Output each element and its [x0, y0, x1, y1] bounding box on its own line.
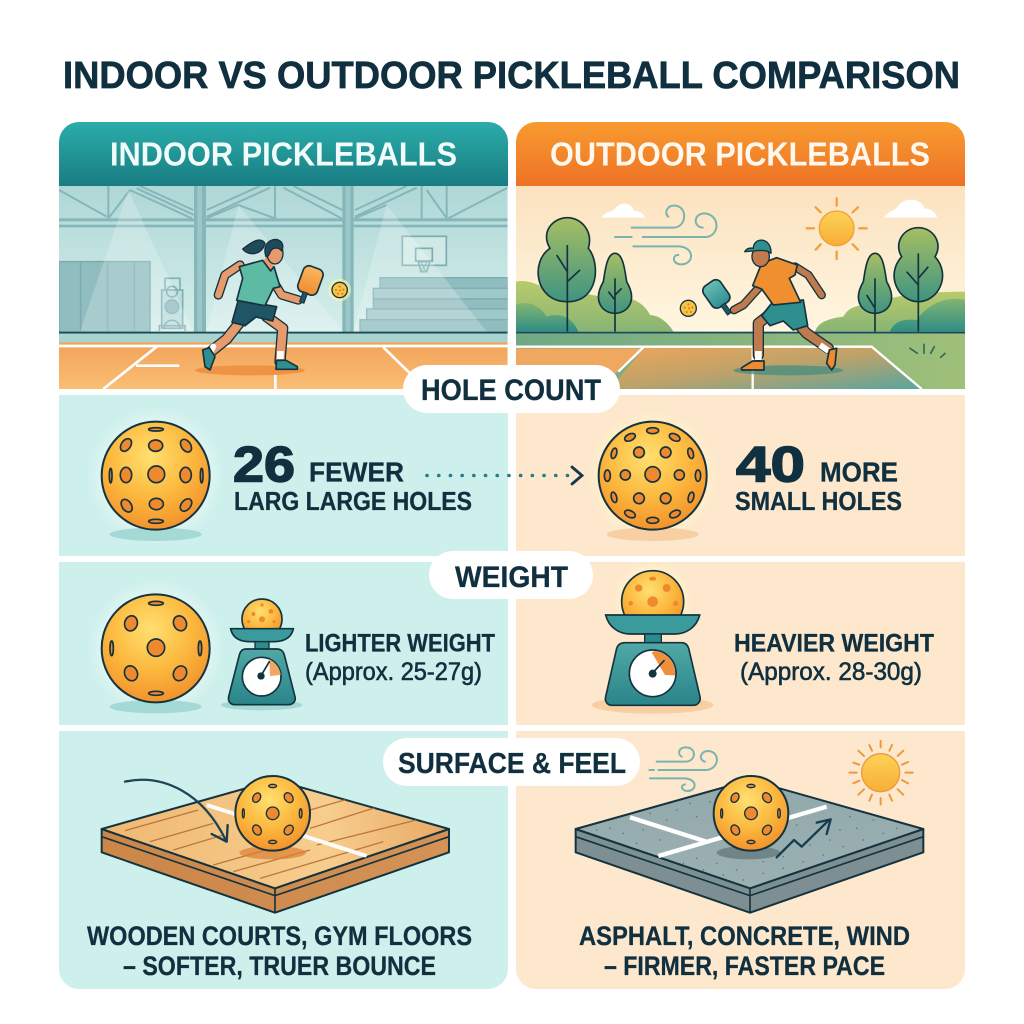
surface text: indoor [87, 921, 472, 981]
hole count text: indoor: FEWER [309, 456, 404, 488]
indoor ball in flight [328, 279, 351, 301]
surface text: outdoor [579, 921, 910, 981]
heading: hole count pill [403, 365, 620, 413]
surface text: indoor: – SOFTER, TRUER BOUNCE [123, 951, 436, 981]
ball machine [159, 278, 185, 331]
outdoor ball in flight [680, 300, 696, 316]
heading: surface and feel pill: SURFACE & FEEL [398, 748, 626, 780]
icon: wind [649, 747, 717, 791]
icon: outdoor scale with ball [592, 560, 713, 714]
ceiling light beams [80, 190, 487, 332]
panel: indoor header [59, 122, 508, 186]
illustration: wooden court with ball [102, 776, 449, 913]
panel: indoor hole count row [59, 395, 508, 556]
arrow: incoming ball path [125, 780, 228, 842]
illustration: indoor gym scene [59, 186, 508, 389]
hole count text: outdoor: MORE [820, 456, 898, 488]
grass tufts [910, 344, 945, 357]
weight text: outdoor [734, 630, 934, 686]
icon: sun [849, 741, 913, 805]
panel: outdoor surface row [516, 731, 965, 989]
icon: indoor ball for weight [87, 580, 224, 717]
weight text: indoor: (Approx. 25-27g) [305, 658, 482, 686]
icon: indoor scale with ball [221, 599, 302, 710]
title: INDOOR VS OUTDOOR PICKLEBALL COMPARISON [63, 55, 960, 97]
surface text: outdoor: – FIRMER, FASTER PACE [604, 951, 885, 981]
hole count text: indoor [233, 436, 472, 516]
player shadow [195, 365, 305, 375]
heading: weight pill [429, 551, 593, 599]
indoor player [203, 239, 325, 370]
heading: surface and feel pill [383, 738, 640, 786]
hills [516, 281, 673, 332]
outdoor player [700, 240, 837, 370]
heading: weight pill: WEIGHT [455, 561, 568, 594]
court [516, 347, 922, 389]
panel: outdoor weight row [516, 562, 965, 725]
panel: indoor weight row [59, 562, 508, 725]
arrow: dotted comparison arrow [427, 467, 582, 484]
arrow: fast bounce zigzag [777, 819, 831, 857]
icon: indoor ball with 26 large holes [87, 407, 224, 544]
illustration: outdoor park scene [516, 186, 965, 389]
hole count text: outdoor [735, 436, 902, 516]
weight text: indoor: LIGHTER WEIGHT [305, 630, 495, 658]
panel: outdoor header: OUTDOOR PICKLEBALLS [550, 136, 930, 172]
hole count text: outdoor: 40 [736, 436, 805, 492]
weight text: outdoor: HEAVIER WEIGHT [734, 630, 934, 658]
lockers [59, 262, 150, 332]
icon: outdoor ball with 40 small holes [584, 407, 721, 544]
panel: indoor header: INDOOR PICKLEBALLS [110, 136, 457, 172]
surface text: outdoor: ASPHALT, CONCRETE, WIND [579, 921, 910, 951]
panel: outdoor header [516, 122, 965, 186]
weight text: outdoor: (Approx. 28-30g) [740, 658, 922, 686]
hole count text: indoor: LARG LARGE HOLES [234, 486, 472, 516]
wind lines [615, 206, 716, 264]
sun [807, 198, 867, 259]
panel: outdoor hole count row [516, 395, 965, 556]
clouds [602, 200, 937, 218]
weight text: indoor [305, 630, 495, 686]
hole count text: indoor: 26 [233, 436, 295, 492]
bleachers [360, 278, 508, 332]
trees [538, 218, 943, 332]
illustration: asphalt court with ball [576, 741, 923, 913]
surface text: indoor: WOODEN COURTS, GYM FLOORS [87, 921, 472, 951]
panel: indoor surface row [59, 731, 508, 989]
heading: hole count pill: HOLE COUNT [421, 374, 601, 407]
basketball hoop [402, 236, 446, 272]
hole count text: outdoor: SMALL HOLES [735, 486, 902, 516]
